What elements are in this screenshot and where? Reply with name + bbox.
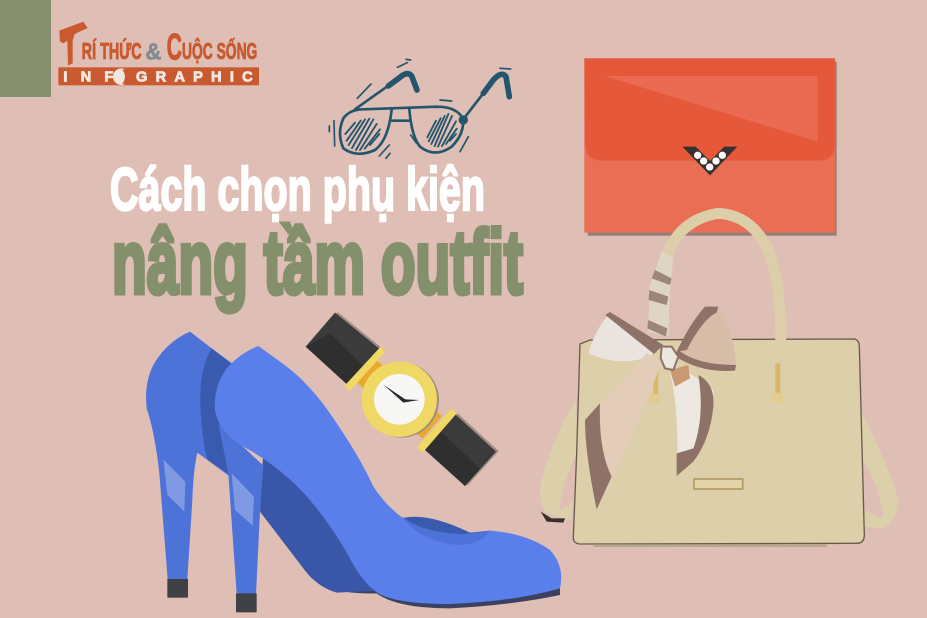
green corner block xyxy=(0,0,51,97)
scarf right loop xyxy=(673,307,736,371)
logo: Tri Thuc & Cuoc Song Infographic xyxy=(58,22,259,86)
top handle xyxy=(665,213,781,367)
scarf left loop xyxy=(588,312,663,361)
logo: Tri Thuc & Cuoc Song Infographic: RÍ THỨC xyxy=(82,38,142,64)
bag body xyxy=(573,339,864,544)
scarf left tail xyxy=(585,353,662,509)
clutch clasp xyxy=(682,147,737,175)
blue high heels xyxy=(146,332,561,612)
watch lugs xyxy=(357,360,442,439)
icon: sunglasses xyxy=(329,59,511,158)
title line 2: nâng tầm outfit xyxy=(112,212,523,313)
title line 1: Cách chọn phụ kiện xyxy=(110,156,485,223)
nameplate xyxy=(694,479,743,489)
clutch bag xyxy=(584,58,837,236)
shoulder straps xyxy=(540,400,898,528)
front shoe insole xyxy=(402,517,490,548)
logo: Tri Thuc & Cuoc Song Infographic: C xyxy=(167,25,182,67)
handle hardware xyxy=(775,363,780,393)
watch strap xyxy=(306,312,499,486)
logo: Tri Thuc & Cuoc Song Infographic: UỘC SỐNG xyxy=(182,38,257,64)
back shoe xyxy=(146,332,237,598)
wristwatch xyxy=(306,312,499,486)
watch face xyxy=(362,362,439,438)
logo: Tri Thuc & Cuoc Song Infographic: & xyxy=(145,38,161,64)
front shoe heel xyxy=(218,423,263,594)
logo: Tri Thuc & Cuoc Song Infographic: INF xyxy=(63,70,113,86)
front shoe underside xyxy=(260,450,383,593)
scarf wrap on handle xyxy=(647,252,673,337)
front shoe body xyxy=(215,346,561,604)
front shoe sole shadow xyxy=(310,577,560,608)
logo: Tri Thuc & Cuoc Song Infographic: GRAPHIC xyxy=(136,70,253,86)
scarf right tail xyxy=(670,365,713,476)
beige handbag with scarf xyxy=(540,213,898,547)
scarf knot xyxy=(661,347,678,370)
